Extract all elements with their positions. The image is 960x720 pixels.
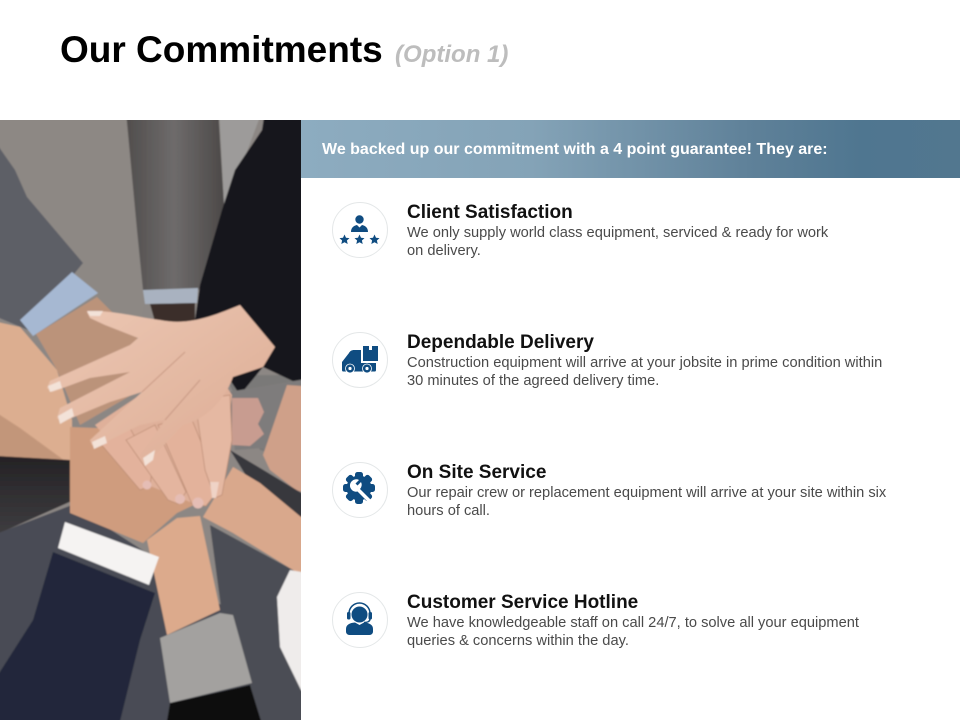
heading: customer service hotline: Customer Service Hotline — [407, 592, 638, 613]
text: customer service hotline — [407, 615, 859, 648]
heading: client satisfaction: Client Satisfaction — [407, 202, 573, 223]
icon: headset agent — [332, 592, 388, 648]
heading: dependable delivery: Dependable Delivery — [407, 332, 594, 353]
text: client satisfaction — [407, 225, 828, 258]
lower hand fingers — [100, 428, 152, 490]
team hands photo — [0, 120, 301, 720]
icon: person with three stars — [332, 202, 388, 258]
skin under the fingers — [95, 345, 232, 506]
fingernails — [87, 311, 103, 316]
header banner — [301, 120, 960, 178]
text: client satisfaction: We only supply world class equipment, serviced & ready for work — [407, 225, 828, 241]
text: on site service — [407, 485, 886, 518]
text: customer service hotline: We have knowledgeable staff on call 24/7, to solve all your equipment — [407, 615, 859, 631]
text: client satisfaction: on delivery. — [407, 242, 481, 258]
text: dependable delivery: 30 minutes of the agreed delivery time. — [407, 372, 659, 388]
text: on site service: hours of call. — [407, 502, 490, 518]
banner text: We backed up our commitment with a 4 point guarantee! They are: — [322, 141, 828, 158]
text: on site service: Our repair crew or replacement equipment will arrive at your site within six — [407, 485, 886, 501]
icon: gear and wrench — [332, 462, 388, 518]
top female hand — [47, 305, 275, 462]
text: dependable delivery: Construction equipment will arrive at your jobsite in prime condition within — [407, 355, 882, 371]
icon: delivery truck — [332, 332, 388, 388]
text: dependable delivery — [407, 355, 882, 388]
heading: on site service: On Site Service — [407, 462, 546, 483]
title: Our Commitments (Option 1) — [60, 29, 508, 70]
text: customer service hotline: queries & concerns within the day. — [407, 632, 629, 648]
cuffs and sleeves — [58, 522, 159, 585]
